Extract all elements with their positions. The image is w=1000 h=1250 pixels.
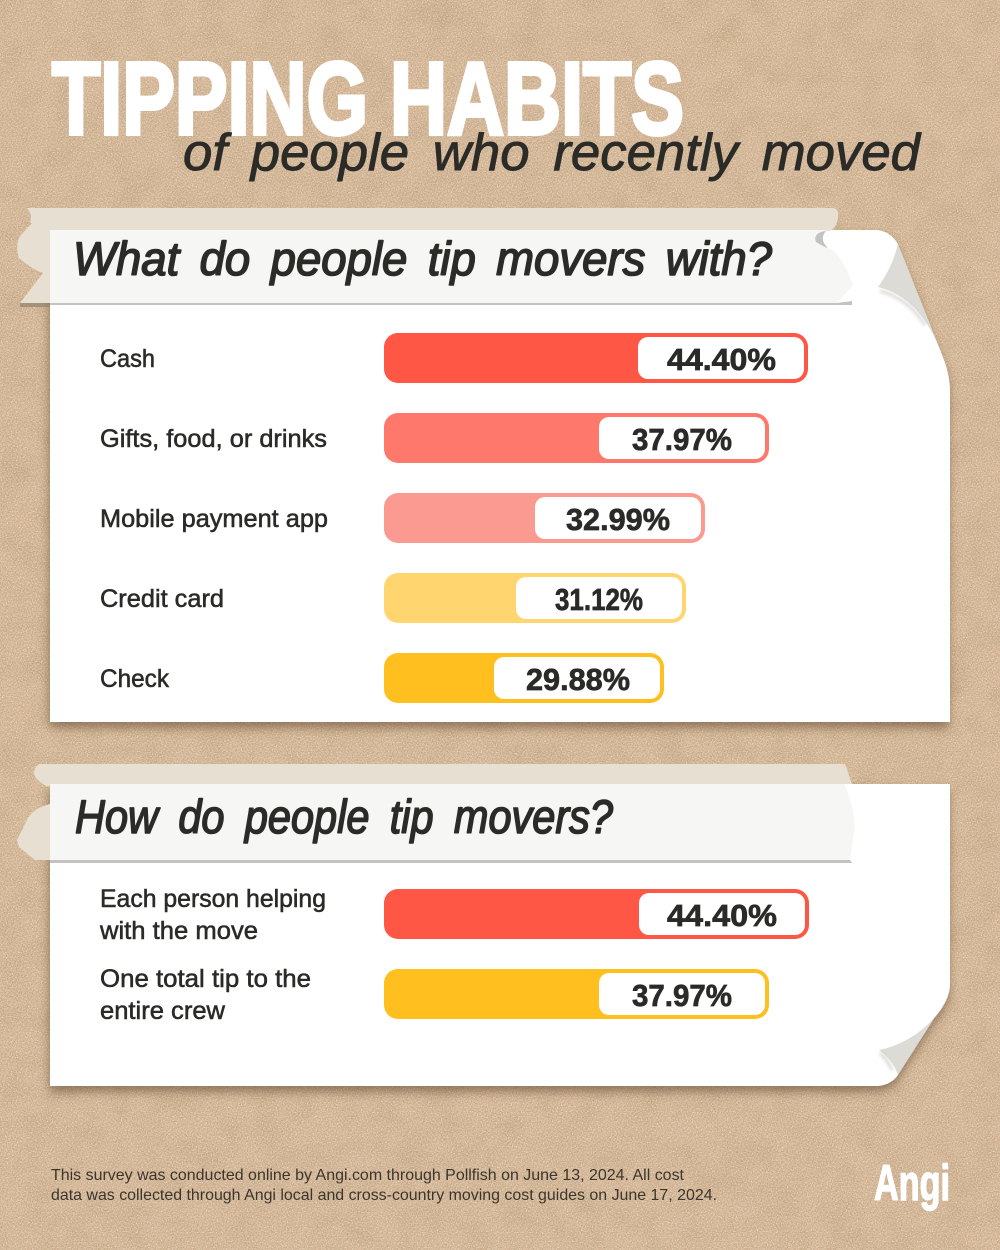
- heading tape: [17, 208, 853, 307]
- row: check: [100, 653, 664, 703]
- row: credit card: [100, 573, 686, 623]
- row: one total tip to the entire crew: 37.97%: [632, 978, 732, 1013]
- row: gifts, food, or drinks: [100, 413, 769, 463]
- row: each person helping with the move: [99, 885, 809, 945]
- heading: How do people tip movers?: [75, 790, 613, 843]
- panel: tip methods: [17, 208, 950, 722]
- curl shadow on sheet: [880, 291, 925, 325]
- row: each person helping with the move: Each person helping: [100, 885, 326, 913]
- row: mobile payment app: [100, 493, 705, 543]
- heading tape: [17, 764, 855, 863]
- row: gifts, food, or drinks: Gifts, food, or drinks: [100, 425, 327, 453]
- row: gifts, food, or drinks: 37.97%: [632, 422, 732, 457]
- row: each person helping with the move: 44.40%: [667, 898, 777, 933]
- footnote: This survey was conducted online by Angi.com through Pollfish on June 13, 2024. All cost: [51, 1167, 685, 1184]
- row: one total tip to the entire crew: [100, 965, 769, 1025]
- logo: Angi: Angi: [874, 1155, 950, 1211]
- paper sheet with curled bottom-right corner: [50, 784, 950, 1086]
- row: mobile payment app: 32.99%: [566, 502, 670, 537]
- heading: What do people tip movers with?: [73, 232, 772, 285]
- row: one total tip to the entire crew: entire crew: [100, 997, 226, 1025]
- curl shadow on sheet: [880, 1053, 892, 1070]
- row: each person helping with the move: with the move: [99, 917, 258, 945]
- footnote: [51, 1167, 717, 1204]
- row: cash: 44.40%: [667, 342, 776, 377]
- row: cash: Cash: [100, 345, 155, 373]
- row: mobile payment app: Mobile payment app: [100, 505, 328, 533]
- subtitle: of people who recently moved: [183, 124, 922, 182]
- row: check: 29.88%: [526, 662, 630, 697]
- row: credit card: 31.12%: [555, 582, 643, 617]
- row: one total tip to the entire crew: One total tip to the: [100, 965, 311, 993]
- title: TIPPING HABITS: [52, 41, 684, 156]
- row: check: Check: [100, 665, 169, 693]
- row: credit card: Credit card: [100, 585, 224, 613]
- panel: how people tip: [17, 764, 950, 1086]
- row: cash: [100, 333, 808, 383]
- paper sheet with curled top-right corner: [50, 230, 950, 722]
- footnote: data was collected through Angi local and cross-country moving cost guides on June 17, 2024.: [51, 1187, 717, 1204]
